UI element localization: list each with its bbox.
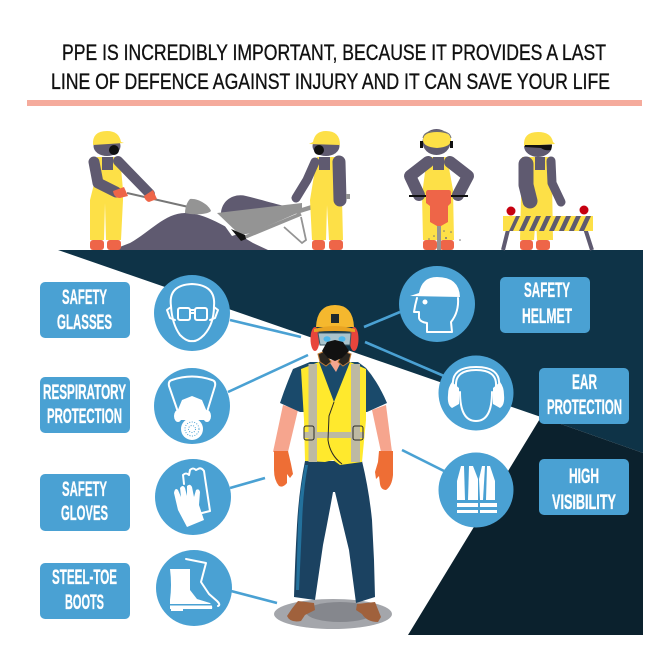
barricade — [503, 206, 593, 250]
jackhammer — [426, 190, 451, 250]
label: safety gloves — [40, 474, 130, 531]
icon: safety helmet — [399, 266, 475, 342]
label: ear protection: EAR — [572, 371, 597, 394]
label: respiratory protection: PROTECTION — [47, 405, 122, 428]
worker 4 with barricade — [503, 132, 593, 250]
label: steel-toe boots — [40, 563, 130, 619]
gloves — [274, 451, 393, 490]
icon: safety glasses — [154, 275, 230, 351]
worker 3 with jackhammer — [409, 129, 468, 250]
worker 2 with wheelbarrow — [296, 131, 350, 250]
neck — [328, 360, 342, 372]
goggles — [318, 333, 351, 345]
icon: respirator — [154, 368, 230, 444]
ear muffs — [310, 327, 358, 351]
label: safety helmet: SAFETY — [524, 279, 570, 302]
respirator mask — [318, 340, 351, 366]
background: dark lower panel — [408, 417, 643, 635]
icon: ear protection — [438, 356, 514, 430]
boots — [287, 601, 381, 622]
label: high visibility: HIGH — [569, 465, 599, 488]
shirt — [280, 362, 387, 412]
background: navy diagonal panel — [58, 250, 643, 453]
label: ear protection — [539, 368, 629, 424]
icon: gloves — [155, 459, 231, 535]
title — [51, 40, 610, 94]
hard hat — [314, 305, 355, 332]
label: safety glasses: GLASSES — [57, 311, 112, 334]
gravel pile — [112, 213, 268, 250]
label: safety helmet: HELMET — [522, 305, 572, 328]
trousers — [294, 461, 375, 603]
label: high visibility: VISIBILITY — [552, 491, 616, 514]
safety vest — [301, 362, 366, 465]
label: safety glasses — [40, 282, 130, 338]
shadow — [274, 599, 392, 629]
arms — [273, 405, 392, 452]
label: steel-toe boots: STEEL-TOE — [52, 566, 117, 589]
central figure in full PPE — [273, 305, 393, 629]
worker 1 with shovel — [90, 131, 211, 250]
label: high visibility — [539, 459, 629, 515]
label: safety glasses: SAFETY — [62, 286, 107, 309]
label: safety gloves: GLOVES — [61, 502, 108, 525]
icon: boots — [156, 550, 232, 626]
label: safety gloves: SAFETY — [62, 478, 107, 501]
label: respiratory protection: RESPIRATORY — [43, 381, 126, 404]
icon: high visibility vest — [438, 452, 514, 528]
title underline — [27, 100, 642, 106]
label: respiratory protection — [40, 377, 130, 433]
label: safety helmet — [500, 277, 590, 333]
connector lines — [228, 312, 444, 603]
wheelbarrow — [217, 195, 335, 243]
label: steel-toe boots: BOOTS — [65, 591, 104, 614]
worker scene: shovelling and wheelbarrow — [90, 131, 350, 250]
